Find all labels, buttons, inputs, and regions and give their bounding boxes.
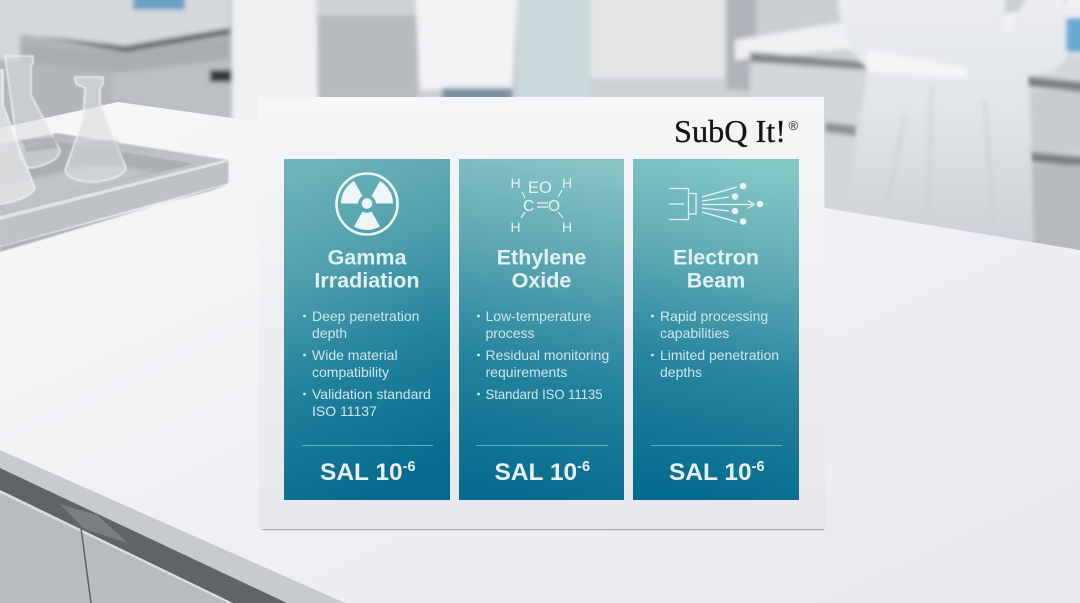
logo: SubQ It!: ® [788, 118, 798, 133]
bullet list: process [486, 325, 535, 341]
bullet list: Limited penetration [660, 347, 779, 363]
logo: SubQ It!: SubQ It! [674, 114, 786, 149]
panel: Ethylene Oxide [459, 159, 624, 500]
panel: Gamma Irradiation [284, 159, 450, 500]
icon: EO molecule: EO [528, 179, 552, 197]
icon: radiation symbol [336, 174, 398, 234]
icon: EO molecule: H [562, 219, 572, 235]
bullet list [651, 308, 779, 380]
background: laboratory scene [0, 0, 1080, 260]
bullet list: capabilities [660, 325, 729, 341]
heading: Ethylene Oxide: Ethylene [497, 246, 586, 270]
icon: EO molecule [510, 175, 572, 235]
heading: Electron Beam: Electron [673, 246, 759, 270]
bullet list: Deep penetration [312, 308, 419, 324]
bullet list: depth [312, 325, 347, 341]
card: sterilization methods sign [258, 97, 826, 529]
flask: front left [0, 70, 35, 205]
SAL value: -6 [403, 459, 416, 475]
flask: right [65, 77, 126, 182]
icon: EO molecule: O [548, 198, 560, 215]
bullet list: Low-temperature [486, 308, 592, 324]
bullet list: compatibility [312, 364, 389, 380]
bullet list [477, 308, 609, 402]
bullet list: Wide material [312, 347, 398, 363]
icon: EO molecule: C [523, 198, 534, 215]
SAL value: -6 [752, 459, 765, 475]
bullet list: ISO 11137 [312, 403, 377, 419]
bullet list: requirements [486, 364, 567, 380]
SAL value: -6 [577, 459, 590, 475]
bullet list: Rapid processing [660, 308, 768, 324]
panel: Electron Beam [633, 159, 799, 500]
heading: Gamma Irradiation: Gamma [328, 246, 407, 270]
flask: back [5, 56, 60, 168]
bullet list: Validation standard [312, 386, 431, 402]
SAL value: SAL 10 [494, 459, 577, 486]
background: counter front edge and drawers [0, 450, 345, 603]
background: tray of glass flasks [0, 56, 228, 252]
icon: electron beam emitter [669, 183, 763, 225]
bullet list: Standard ISO 11135 [486, 386, 603, 402]
heading: Ethylene Oxide: Oxide [512, 268, 571, 292]
SAL value: SAL 10 [320, 459, 403, 486]
heading: Gamma Irradiation: Irradiation [314, 268, 420, 292]
bullet list [303, 308, 431, 419]
bullet list: depths [660, 364, 702, 380]
SAL value: SAL 10 [669, 459, 752, 486]
heading: Electron Beam: Beam [687, 268, 745, 292]
icon: EO molecule: H [510, 175, 521, 191]
card shadow [262, 527, 824, 530]
icon: EO molecule: H [562, 175, 572, 191]
bullet list: Residual monitoring [486, 347, 609, 363]
icon: EO molecule: H [510, 219, 521, 235]
